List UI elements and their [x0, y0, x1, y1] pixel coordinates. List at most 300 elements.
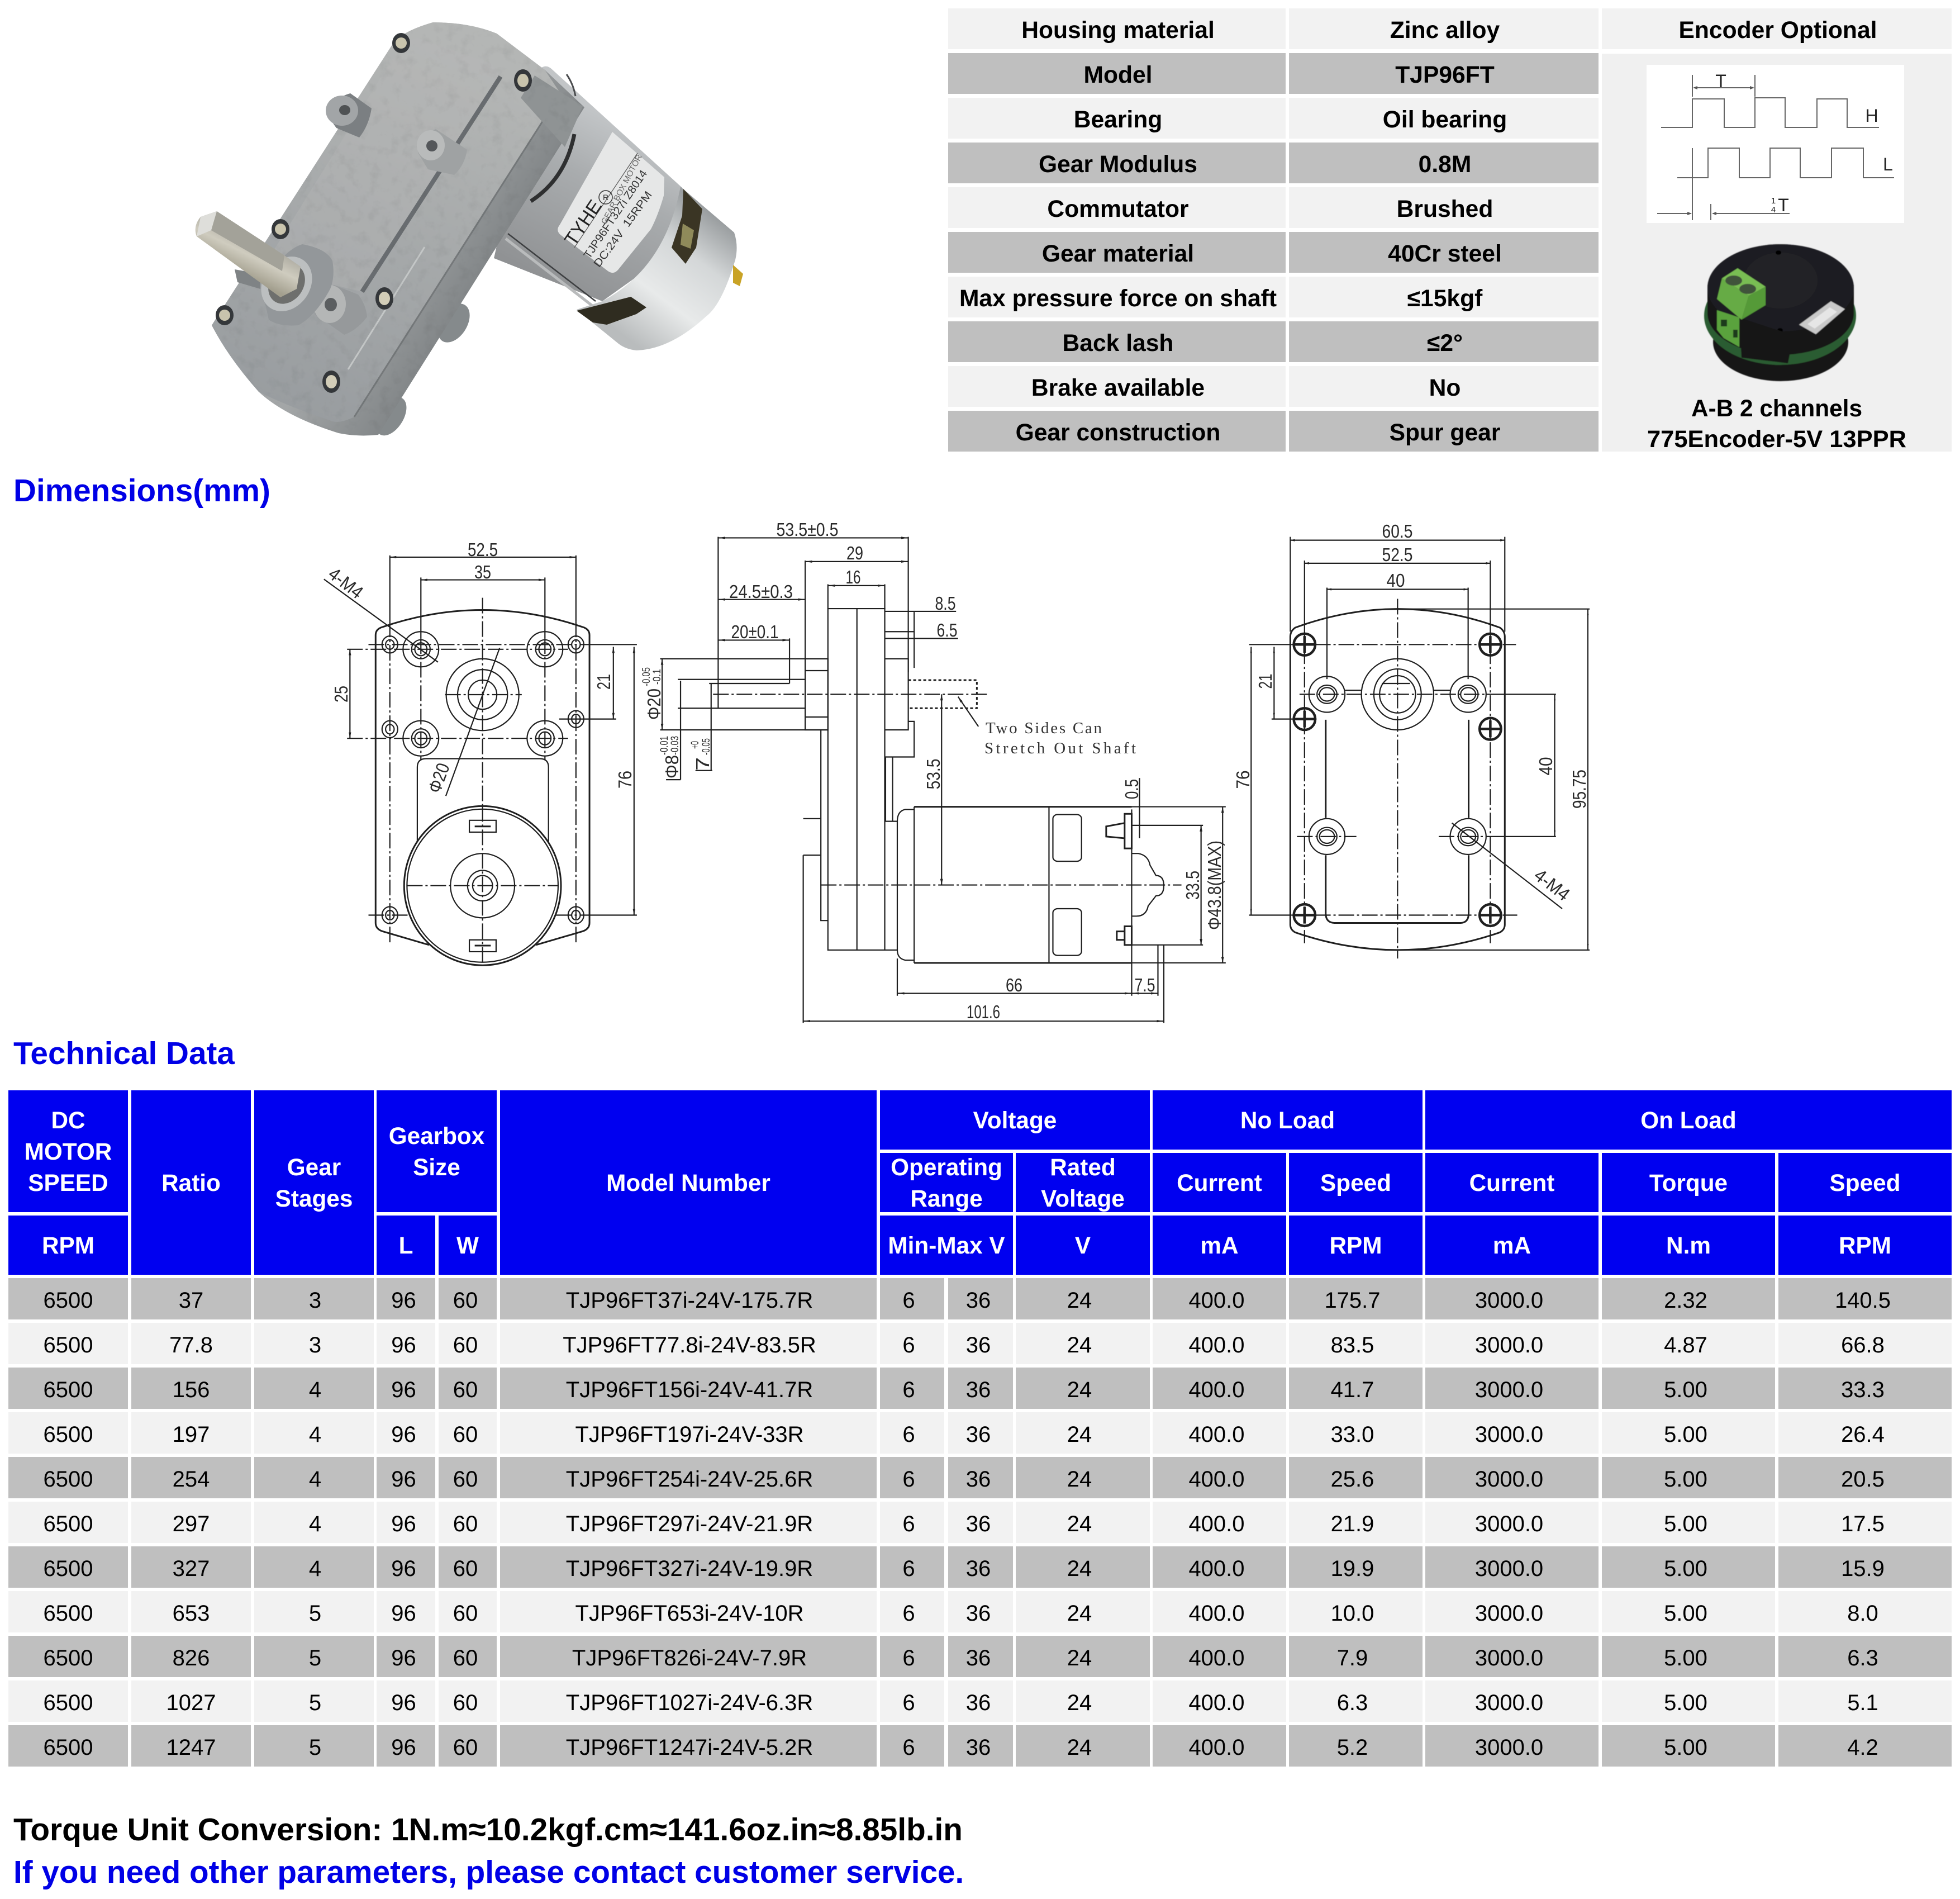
row: gear modulus [948, 143, 1599, 183]
drawing: rear view [1233, 521, 1590, 958]
data row: ratio 254: 25.6 [1331, 1467, 1374, 1492]
data row: ratio 37: 2.32 [1664, 1288, 1707, 1313]
data row: ratio 826: 400.0 [1188, 1646, 1245, 1670]
dimension labels: front view: 4-M4 [325, 563, 367, 602]
dimension labels: side view: 66 [1006, 975, 1022, 995]
dimension labels: side view: -0.03 [669, 736, 681, 755]
dimension labels: side view: 16 [846, 567, 860, 587]
data row: ratio 37: 175.7 [1324, 1288, 1381, 1313]
cover screws [216, 33, 532, 393]
data row: ratio 37: 36 [966, 1288, 991, 1313]
row: commutator [948, 187, 1599, 228]
row: gear construction: Spur gear [1390, 419, 1500, 446]
row: max pressure: Max pressure force on shaft [959, 285, 1277, 312]
row: bearing: Oil bearing [1383, 106, 1507, 133]
rear bosses [369, 298, 476, 441]
table header: Torque [1649, 1170, 1728, 1196]
table header: Ratio [161, 1170, 221, 1196]
data row: ratio 1027: 400.0 [1188, 1691, 1245, 1715]
data row: ratio 826: 6.3 [1847, 1646, 1878, 1670]
table header: Current [1469, 1170, 1554, 1196]
data row: ratio 1027: 96 [391, 1691, 416, 1715]
data row: ratio 327: 6500 [44, 1556, 93, 1581]
table header: RPM [42, 1232, 94, 1259]
table header: Rated [1050, 1154, 1116, 1180]
data row: ratio 197: 400.0 [1188, 1422, 1245, 1447]
dimension labels: rear view [1233, 521, 1590, 905]
data row: ratio 297: 4 [309, 1512, 321, 1536]
data row: ratio 197: TJP96FT197i-24V-33R [575, 1422, 804, 1447]
data row: ratio 327: 3000.0 [1475, 1556, 1543, 1581]
motor can [494, 67, 743, 350]
data row: ratio 197: 6500 [44, 1422, 93, 1447]
data row: ratio 327: 15.9 [1841, 1556, 1885, 1581]
data row: ratio 1027: 5.1 [1847, 1691, 1878, 1715]
dimension labels: side view: Φ20 [644, 689, 664, 720]
row: gear modulus: Gear Modulus [1039, 151, 1197, 178]
data row: ratio 297: 400.0 [1188, 1512, 1245, 1536]
data row: ratio 327: 96 [391, 1556, 416, 1581]
row: max pressure [948, 277, 1599, 317]
dimension labels: rear view: 60.5 [1382, 521, 1412, 542]
data row: ratio 254: 3000.0 [1475, 1467, 1543, 1492]
data row: ratio 327: 5.00 [1664, 1556, 1707, 1581]
dimension labels: rear view: 21 [1255, 674, 1276, 689]
dimension labels: rear view: 52.5 [1382, 544, 1412, 565]
data row: ratio 297: 3000.0 [1475, 1512, 1543, 1536]
panel: encoder [1602, 54, 1952, 452]
dimension labels: rear view: 4-M4 [1530, 865, 1574, 905]
data row: ratio 653: 653 [173, 1601, 210, 1626]
data row: ratio 1027: 36 [966, 1691, 991, 1715]
data row: ratio 77.8: 83.5 [1331, 1333, 1374, 1357]
data row: ratio 254: TJP96FT254i-24V-25.6R [566, 1467, 813, 1492]
note: stretch out shaft [984, 719, 1136, 757]
data row: ratio 653: 10.0 [1331, 1601, 1374, 1626]
data row: ratio 37: 24 [1067, 1288, 1092, 1313]
motor label: TYHE [560, 196, 606, 250]
data row: ratio 826: 36 [966, 1646, 991, 1670]
data row: ratio 1027 [8, 1680, 1952, 1722]
dimension labels: side view: -0.1 [651, 669, 663, 685]
data row: ratio 156: 5.00 [1664, 1378, 1707, 1402]
table header: SPEED [28, 1170, 108, 1196]
motor label: GEAR BOX MOTOR [600, 153, 644, 226]
dimension labels: rear view: 95.75 [1569, 770, 1590, 809]
note: stretch out shaft: Two Sides Can [986, 719, 1102, 737]
data row: ratio 826: 5 [309, 1646, 321, 1670]
table header: Model Number [606, 1170, 770, 1196]
data row: ratio 254: 36 [966, 1467, 991, 1492]
dimension labels: front view: 25 [331, 686, 351, 702]
data row: ratio 254: 5.00 [1664, 1467, 1707, 1492]
data row: ratio 156: 400.0 [1188, 1378, 1245, 1402]
table header: Gear [287, 1154, 341, 1180]
dimension labels: front view: 76 [615, 771, 635, 789]
dimension labels: side view: 7.5 [1134, 975, 1155, 995]
data row: ratio 826: 96 [391, 1646, 416, 1670]
data row: ratio 77.8: 3000.0 [1475, 1333, 1543, 1357]
data row: ratio 37: 37 [179, 1288, 203, 1313]
data row: ratio 1027: 1027 [166, 1691, 216, 1715]
data row: ratio 37 [8, 1278, 1952, 1319]
motor label: TJP96FT327i Z8014 [582, 168, 650, 261]
mounting standoffs [313, 93, 467, 335]
data row: ratio 1027: 5.00 [1664, 1691, 1707, 1715]
data row: ratio 297: 60 [453, 1512, 478, 1536]
data row: ratio 254: 24 [1067, 1467, 1092, 1492]
data row: ratio 653: 400.0 [1188, 1601, 1245, 1626]
row: housing material: Zinc alloy [1390, 17, 1500, 44]
data row: ratio 156: 33.3 [1841, 1378, 1885, 1402]
table header: Operating [891, 1154, 1002, 1180]
data row: ratio 37: 60 [453, 1288, 478, 1313]
data row: ratio 156: 24 [1067, 1378, 1092, 1402]
data row: ratio 1247: TJP96FT1247i-24V-5.2R [566, 1735, 813, 1760]
dimension labels: side view: -0.05 [641, 667, 653, 686]
data row: ratio 254: 4 [309, 1467, 321, 1492]
data row: ratio 77.8: 60 [453, 1333, 478, 1357]
motor label: DC:24V 15RPM [592, 189, 655, 269]
data row: ratio 297: 6 [902, 1512, 915, 1536]
data row: ratio 653: 8.0 [1847, 1601, 1878, 1626]
data row: ratio 1247: 3000.0 [1475, 1735, 1543, 1760]
data row: ratio 1247: 400.0 [1188, 1735, 1245, 1760]
data row: ratio 77.8: 4.87 [1664, 1333, 1707, 1357]
dimension labels: side view: 33.5 [1182, 871, 1203, 900]
product photo: gear motor [196, 22, 743, 436]
data row: ratio 297: 5.00 [1664, 1512, 1707, 1536]
data row: ratio 197: 24 [1067, 1422, 1092, 1447]
data row: ratio 1027: TJP96FT1027i-24V-6.3R [566, 1691, 813, 1715]
data row: ratio 156: 96 [391, 1378, 416, 1402]
data row: ratio 254: 96 [391, 1467, 416, 1492]
table header: Range [910, 1185, 983, 1212]
data row: ratio 327 [8, 1546, 1952, 1588]
heading: dimensions: Dimensions(mm) [13, 473, 270, 509]
table header: Speed [1830, 1170, 1900, 1196]
data row: ratio 826: TJP96FT826i-24V-7.9R [572, 1646, 807, 1670]
data row: ratio 197: 6 [902, 1422, 915, 1447]
data row: ratio 1027: 3000.0 [1475, 1691, 1543, 1715]
motor vents and terminal [672, 189, 702, 264]
data row: ratio 1027: 24 [1067, 1691, 1092, 1715]
data row: ratio 37: 140.5 [1835, 1288, 1891, 1313]
row: housing material: Housing material [1021, 17, 1215, 44]
dimension labels: side view: 20±0.1 [731, 621, 779, 642]
gearbox housing [212, 22, 584, 435]
dimension labels: side view: Φ8 [662, 755, 682, 778]
data row: ratio 1247: 5.00 [1664, 1735, 1707, 1760]
data row: ratio 1247: 5 [309, 1735, 321, 1760]
data row: ratio 197: 33.0 [1331, 1422, 1374, 1447]
row: model [948, 53, 1599, 94]
data row: ratio 197: 3000.0 [1475, 1422, 1543, 1447]
data row: ratio 826: 6 [902, 1646, 915, 1670]
data row: ratio 254: 400.0 [1188, 1467, 1245, 1492]
data row: ratio 1027: 6 [902, 1691, 915, 1715]
row: bearing: Bearing [1074, 106, 1162, 133]
data row: ratio 826: 3000.0 [1475, 1646, 1543, 1670]
heading: technical data: Technical Data [13, 1036, 235, 1071]
table header: mA [1493, 1232, 1531, 1259]
row: brake [948, 366, 1599, 407]
data row: ratio 197 [8, 1412, 1952, 1454]
data row: ratio 327: 24 [1067, 1556, 1092, 1581]
data row: ratio 1027: 60 [453, 1691, 478, 1715]
data row: ratio 653 [8, 1591, 1952, 1632]
row: model: Model [1083, 61, 1153, 88]
data row: ratio 254: 6500 [44, 1467, 93, 1492]
encoder waveform diagram [1647, 65, 1904, 223]
encoder waveform diagram: 4 [1771, 205, 1776, 215]
spec table [948, 8, 1952, 452]
data row: ratio 156: 6500 [44, 1378, 93, 1402]
data row: ratio 156: TJP96FT156i-24V-41.7R [566, 1378, 813, 1402]
data row: ratio 254: 60 [453, 1467, 478, 1492]
data row: ratio 156: 156 [173, 1378, 210, 1402]
data row: ratio 653: 5 [309, 1601, 321, 1626]
motor label [558, 132, 664, 273]
row: gear construction: Gear construction [1016, 419, 1220, 446]
data row: ratio 327: 6 [902, 1556, 915, 1581]
data row: ratio 826: 5.00 [1664, 1646, 1707, 1670]
table header: L [399, 1232, 413, 1259]
data row: ratio 197: 36 [966, 1422, 991, 1447]
data row: ratio 826: 24 [1067, 1646, 1092, 1670]
data row: ratio 156 [8, 1368, 1952, 1409]
data row: ratio 77.8: 6500 [44, 1333, 93, 1357]
data row: ratio 297: 96 [391, 1512, 416, 1536]
data row: ratio 653: 3000.0 [1475, 1601, 1543, 1626]
data row: ratio 653: 6 [902, 1601, 915, 1626]
dimension labels: side view: 29 [846, 543, 863, 563]
table header: V [1075, 1232, 1091, 1259]
data row: ratio 297: 21.9 [1331, 1512, 1374, 1536]
data row: ratio 653: TJP96FT653i-24V-10R [575, 1601, 804, 1626]
row: gear material [948, 232, 1599, 273]
data row: ratio 37: 96 [391, 1288, 416, 1313]
data row: ratio 653: 96 [391, 1601, 416, 1626]
data row: ratio 254 [8, 1457, 1952, 1498]
table header: DC [51, 1107, 85, 1133]
dimension labels: side view: 53.5 [923, 759, 944, 789]
data row: ratio 156: 4 [309, 1378, 321, 1402]
data row: ratio 156: 60 [453, 1378, 478, 1402]
table header: Size [413, 1154, 460, 1180]
data row: ratio 77.8: 66.8 [1841, 1333, 1885, 1357]
data row: ratio 156: 41.7 [1331, 1378, 1374, 1402]
torque unit conversion note: Torque Unit Conversion: 1N.m≈10.2kgf.cm≈141.6oz.in≈8.85lb.in [13, 1812, 963, 1848]
dimension labels: side view: 101.6 [967, 1001, 1000, 1022]
data row: ratio 297 [8, 1502, 1952, 1543]
row: back lash: Back lash [1063, 330, 1173, 357]
data row: ratio 156: 3000.0 [1475, 1378, 1543, 1402]
drawing: front view [324, 539, 637, 965]
data row: ratio 327: 36 [966, 1556, 991, 1581]
data row: ratio 77.8: 3 [309, 1333, 321, 1357]
row: brake: No [1429, 374, 1461, 401]
data row: ratio 327: 400.0 [1188, 1556, 1245, 1581]
data row: ratio 1027: 6500 [44, 1691, 93, 1715]
data row: ratio 37: 6500 [44, 1288, 93, 1313]
table header: mA [1200, 1232, 1239, 1259]
table header: W [456, 1232, 479, 1259]
dimension labels: front view: 35 [474, 562, 491, 582]
data row: ratio 77.8: 77.8 [169, 1333, 213, 1357]
data row: ratio 653: 6500 [44, 1601, 93, 1626]
data row: ratio 327: 4 [309, 1556, 321, 1581]
data row: ratio 826: 6500 [44, 1646, 93, 1670]
table header: RPM [1839, 1232, 1891, 1259]
table header: Stages [275, 1185, 353, 1212]
table header: N.m [1666, 1232, 1711, 1259]
row: gear material: 40Cr steel [1388, 240, 1502, 267]
table header: Voltage [1041, 1185, 1125, 1212]
panel: dimension drawings [324, 519, 1590, 1023]
data row: ratio 197: 5.00 [1664, 1422, 1707, 1447]
row: back lash [948, 321, 1599, 362]
dimension labels: side view: Φ43.8(MAX) [1204, 841, 1225, 930]
data row: ratio 1247: 4.2 [1847, 1735, 1878, 1760]
data row: ratio 77.8: 36 [966, 1333, 991, 1357]
data row: ratio 297: 17.5 [1841, 1512, 1885, 1536]
data row: ratio 37: TJP96FT37i-24V-175.7R [566, 1288, 813, 1313]
data row: ratio 156: 6 [902, 1378, 915, 1402]
dimension labels: side view: 7 [692, 757, 713, 771]
data row: ratio 77.8: TJP96FT77.8i-24V-83.5R [563, 1333, 816, 1357]
data row: ratio 37: 3 [309, 1288, 321, 1313]
dimension labels: side view [641, 519, 1225, 1022]
table header: RPM [1330, 1232, 1382, 1259]
data row: ratio 156: 36 [966, 1378, 991, 1402]
data row: ratio 1247 [8, 1725, 1952, 1767]
data row: ratio 297: 297 [173, 1512, 210, 1536]
dimension labels: front view [325, 539, 635, 796]
dimension labels: side view: 8.5 [935, 593, 955, 614]
data row: ratio 1247: 5.2 [1337, 1735, 1368, 1760]
encoder waveform diagram: T [1715, 71, 1726, 91]
row: commutator: Brushed [1397, 196, 1493, 222]
dimension labels: rear view: 40 [1535, 757, 1556, 776]
dimension labels: side view: -0.05 [701, 738, 712, 755]
data row: ratio 327: TJP96FT327i-24V-19.9R [566, 1556, 813, 1581]
encoder caption [1647, 395, 1906, 453]
data row: ratio 197: 197 [173, 1422, 210, 1447]
data row: ratio 826: 7.9 [1337, 1646, 1368, 1670]
data row: ratio 1027: 6.3 [1337, 1691, 1368, 1715]
data row: ratio 77.8: 6 [902, 1333, 915, 1357]
table header: Gearbox [389, 1123, 484, 1149]
row: commutator: Commutator [1047, 196, 1189, 222]
dimension labels: side view: 6.5 [936, 620, 958, 640]
encoder waveform diagram: T [1778, 195, 1789, 215]
data row: ratio 197: 60 [453, 1422, 478, 1447]
data row: ratio 653: 5.00 [1664, 1601, 1707, 1626]
data row: ratio 77.8: 400.0 [1188, 1333, 1245, 1357]
data row: ratio 37: 400.0 [1188, 1288, 1245, 1313]
data row: ratio 1247: 24 [1067, 1735, 1092, 1760]
table header [8, 1090, 1952, 1275]
data row: ratio 77.8: 24 [1067, 1333, 1092, 1357]
dimension labels: side view: 24.5±0.3 [729, 581, 793, 602]
data row: ratio 197: 26.4 [1841, 1422, 1885, 1447]
encoder waveform diagram: H [1865, 106, 1878, 126]
table header: Min-Max V [888, 1232, 1005, 1259]
data row: ratio 77.8 [8, 1323, 1952, 1364]
row: model: TJP96FT [1395, 61, 1495, 88]
output shaft and bearing [196, 211, 334, 326]
data row: ratio 197: 4 [309, 1422, 321, 1447]
data row: ratio 1247: 96 [391, 1735, 416, 1760]
data row: ratio 37: 3000.0 [1475, 1288, 1543, 1313]
data row: ratio 1027: 5 [309, 1691, 321, 1715]
data row: ratio 653: 24 [1067, 1601, 1092, 1626]
data row: ratio 254: 6 [902, 1467, 915, 1492]
dimension labels: side view: 53.5±0.5 [777, 519, 838, 540]
motor label: R [603, 193, 608, 202]
encoder waveform diagram: L [1883, 154, 1893, 174]
dimension labels: side view: +0 [689, 741, 701, 749]
data row: ratio 1247: 6500 [44, 1735, 93, 1760]
data row: ratio 653: 36 [966, 1601, 991, 1626]
data row: ratio 826: 60 [453, 1646, 478, 1670]
table header: On Load [1640, 1107, 1737, 1133]
data row: ratio 197: 96 [391, 1422, 416, 1447]
row: gear material: Gear material [1042, 240, 1194, 267]
row: brake: Brake available [1031, 374, 1205, 401]
dimension labels: front view: 52.5 [468, 539, 498, 560]
data row: ratio 653: 60 [453, 1601, 478, 1626]
dimension labels: rear view: 76 [1233, 770, 1253, 789]
note: stretch out shaft: Stretch Out Shaft [984, 739, 1136, 757]
dimension labels: rear view: 40 [1387, 570, 1405, 591]
table header: Current [1177, 1170, 1262, 1196]
encoder photo [1704, 244, 1856, 381]
row: gear modulus: 0.8M [1419, 151, 1471, 178]
data row: ratio 826: 826 [173, 1646, 210, 1670]
row: gear construction [948, 411, 1599, 452]
row: bearing [948, 98, 1599, 139]
technical data table [8, 1090, 1952, 1767]
data row: ratio 297: 6500 [44, 1512, 93, 1536]
data row: ratio 1247: 60 [453, 1735, 478, 1760]
dimension labels: side view: -0.01 [659, 736, 670, 755]
row: max pressure: ≤15kgf [1407, 285, 1482, 312]
data row: ratio 297: 24 [1067, 1512, 1092, 1536]
data row: ratio 327: 327 [173, 1556, 210, 1581]
row: housing material [948, 8, 1952, 49]
encoder caption: A-B 2 channels [1691, 395, 1862, 422]
data row: ratio 77.8: 96 [391, 1333, 416, 1357]
table header: MOTOR [25, 1138, 112, 1165]
customer service note: If you need other parameters, please contact customer service. [13, 1855, 964, 1890]
data row: ratio 327: 60 [453, 1556, 478, 1581]
dimension labels: front view: 21 [593, 674, 614, 690]
data row: ratio 1247: 1247 [166, 1735, 216, 1760]
data row: ratio 297: TJP96FT297i-24V-21.9R [566, 1512, 813, 1536]
row: housing material: Encoder Optional [1678, 17, 1877, 44]
drawing: side view [641, 519, 1226, 1023]
data row: ratio 254: 20.5 [1841, 1467, 1885, 1492]
row: back lash: ≤2° [1427, 330, 1463, 357]
data row: ratio 327: 19.9 [1331, 1556, 1374, 1581]
data row: ratio 297: 36 [966, 1512, 991, 1536]
table header: Voltage [973, 1107, 1057, 1133]
data row: ratio 37: 6 [902, 1288, 915, 1313]
data row: ratio 254: 254 [173, 1467, 210, 1492]
data row: ratio 1247: 6 [902, 1735, 915, 1760]
